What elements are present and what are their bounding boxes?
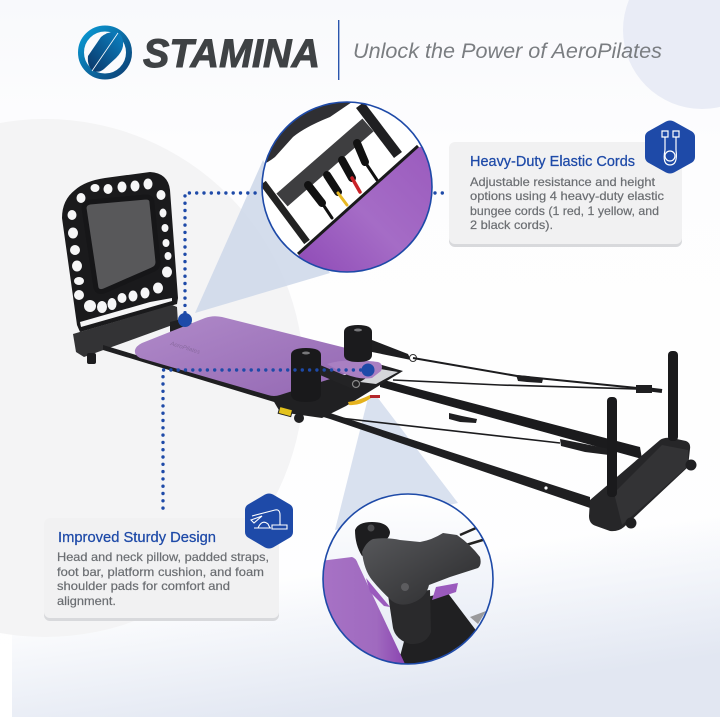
purple pad — [298, 146, 432, 272]
logo: Stamina — [81, 28, 320, 76]
body text: Head and neck pillow, padded straps, — [57, 550, 269, 564]
product: reformer machine — [62, 172, 696, 531]
leader line: cords — [185, 193, 448, 320]
body text: options using 4 heavy-duty elastic — [470, 189, 664, 203]
roller — [355, 522, 390, 556]
icon: elastic cord — [645, 120, 695, 174]
leader line: design — [163, 370, 368, 514]
icon: reformer pad — [245, 494, 293, 548]
panel: sturdy design — [44, 494, 293, 621]
end posts — [607, 397, 617, 497]
four cords — [308, 143, 377, 218]
foot pad — [327, 360, 382, 378]
front rail — [103, 345, 590, 508]
body text: 2 black cords). — [470, 218, 553, 232]
callout cone: pillow — [335, 398, 458, 530]
zoom circle: pillow detail — [310, 494, 493, 668]
rear shoulder pad — [344, 325, 416, 362]
tagline: Unlock the Power of AeroPilates — [353, 39, 662, 63]
front shoulder pad — [291, 348, 360, 402]
panel: elastic cords — [449, 120, 695, 247]
rear rail — [380, 379, 642, 459]
platform cushion — [135, 316, 352, 396]
base of rebounder — [73, 305, 178, 357]
logo: Stamina: STAMINA — [143, 32, 320, 76]
marker: design — [362, 364, 374, 376]
pillow — [362, 533, 481, 605]
heading: Heavy-Duty Elastic Cords — [470, 154, 635, 170]
callout cone: cords — [195, 160, 330, 313]
body text: shoulder pads for comfort and — [57, 579, 230, 593]
body text — [470, 175, 664, 232]
heading: Improved Sturdy Design — [58, 530, 216, 546]
trampoline rebounder — [62, 172, 178, 332]
header divider — [338, 20, 339, 80]
zoom circle: cords detail — [261, 101, 433, 273]
resistance cords — [340, 358, 662, 443]
dark plate — [400, 594, 476, 664]
end base — [589, 438, 690, 531]
rope clips — [449, 375, 652, 455]
body text: bungee cords (1 red, 1 yellow, and — [470, 204, 659, 218]
warning label — [278, 407, 293, 417]
frame bars — [263, 183, 307, 242]
lower foam — [388, 590, 431, 644]
body text — [57, 550, 269, 608]
body text: alignment. — [57, 594, 116, 608]
carriage plate — [270, 365, 403, 418]
black head pad — [266, 102, 351, 163]
marker: cords — [178, 313, 192, 327]
body text: foot bar, platform cushion, and foam — [57, 565, 264, 579]
product: reformer machine: AeroPilates — [168, 341, 201, 356]
purple cushion — [324, 557, 404, 664]
body text: Adjustable resistance and height — [470, 175, 656, 189]
